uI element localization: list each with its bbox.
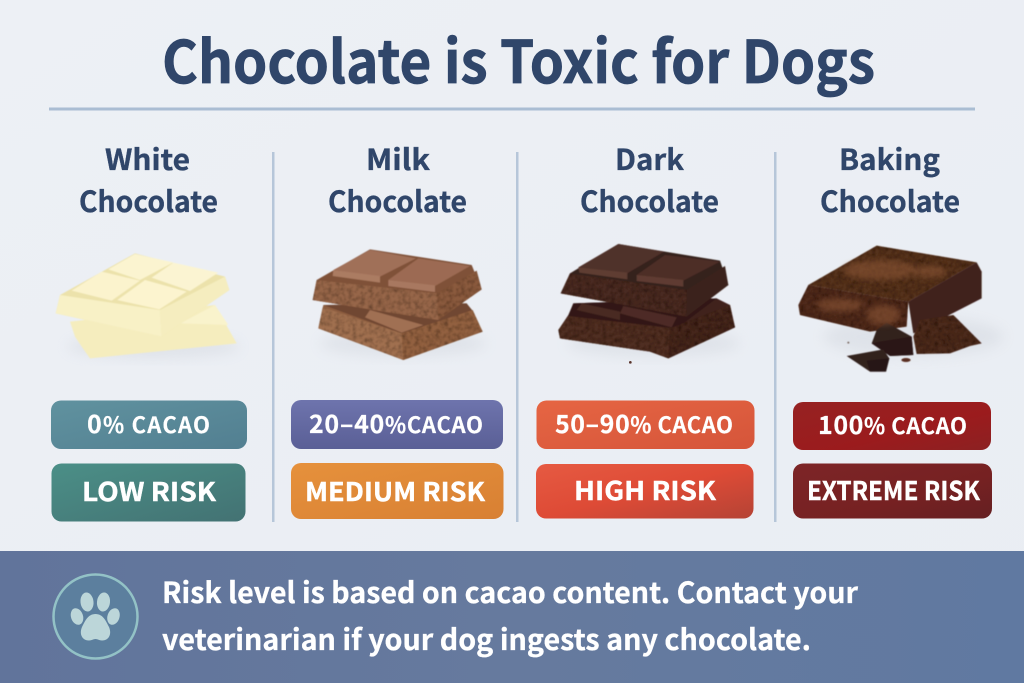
heading: dark chocolate	[580, 137, 719, 221]
badge: extreme risk	[793, 464, 992, 518]
panel: white chocolate	[51, 137, 247, 522]
panel: milk chocolate	[291, 137, 504, 519]
heading: white chocolate	[79, 137, 218, 221]
badge: 0% cacao: 0% CACAO	[87, 405, 210, 441]
image: milk chocolate bar	[313, 249, 487, 360]
heading: baking chocolate: Baking	[839, 137, 940, 179]
badge: 50-90% cacao	[536, 400, 754, 449]
panel: dark chocolate	[536, 137, 754, 518]
image: white chocolate bar	[56, 253, 240, 358]
badge: extreme risk: EXTREME RISK	[807, 471, 980, 508]
badge: 0% cacao	[51, 400, 247, 449]
badge: 100% cacao	[793, 402, 991, 450]
heading: milk chocolate	[328, 137, 467, 221]
badge: medium risk	[291, 463, 504, 519]
heading: baking chocolate	[820, 137, 960, 221]
footer text: veterinarian if your dog ingests any chocolate.	[162, 617, 811, 659]
footer text	[162, 570, 858, 659]
heading: milk chocolate: Chocolate	[328, 179, 467, 221]
heading: white chocolate: White	[105, 137, 190, 179]
image: dark chocolate bar	[558, 244, 740, 364]
badge: low risk	[52, 464, 246, 522]
heading: white chocolate: Chocolate	[79, 179, 218, 221]
heading: dark chocolate: Chocolate	[580, 179, 719, 221]
heading: baking chocolate: Chocolate	[820, 179, 960, 221]
badge: 50-90% cacao: 50–90% CACAO	[555, 405, 733, 441]
footer banner	[0, 551, 1024, 683]
badge: 100% cacao: 100% CACAO	[818, 406, 967, 442]
image: baking chocolate block	[798, 246, 1003, 372]
title: Chocolate is Toxic for Dogs	[162, 15, 875, 100]
icon: paw print	[54, 574, 138, 658]
heading: dark chocolate: Dark	[615, 137, 684, 179]
badge: 20-40% cacao	[291, 400, 503, 449]
footer text: Risk level is based on cacao content. Contact your	[162, 570, 858, 612]
badge: low risk: LOW RISK	[82, 472, 217, 509]
badge: 20-40% cacao: 20–40%CACAO	[309, 405, 483, 441]
panel: baking chocolate	[793, 137, 1003, 518]
badge: high risk	[536, 464, 754, 518]
heading: milk chocolate: Milk	[366, 137, 430, 179]
badge: medium risk: MEDIUM RISK	[305, 472, 486, 509]
badge: high risk: HIGH RISK	[574, 471, 717, 508]
